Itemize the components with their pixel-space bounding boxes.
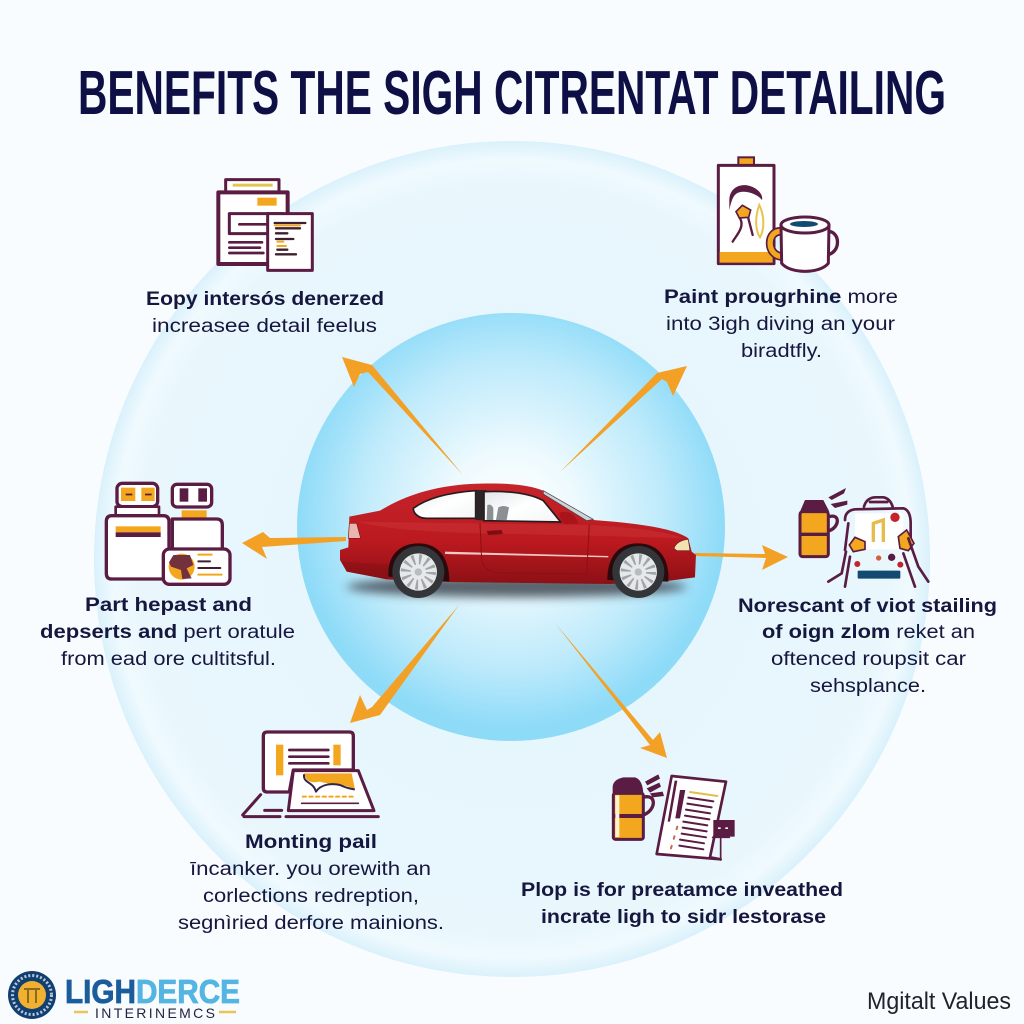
inner circle <box>297 313 725 741</box>
text block: bottom left: īncanker. you orewith an <box>190 859 431 880</box>
icon: bottle and mug <box>718 157 837 271</box>
text block: top right: biradtfly. <box>741 341 822 362</box>
arrow: top left <box>342 357 463 475</box>
text block: bottom left: segnìried derfore mainions. <box>178 913 444 934</box>
text block: right: Norescant of viot stailing <box>738 596 997 617</box>
arrow: bottom right <box>555 623 667 758</box>
text block: bottom right: incrate ligh to sidr lestorase <box>541 907 826 928</box>
text block: top left <box>146 289 384 337</box>
text block: top right <box>664 287 898 362</box>
icon: containers and card <box>106 483 230 584</box>
text block: left: Part hepast and <box>85 595 252 616</box>
seats <box>487 505 509 520</box>
rear window <box>413 491 476 518</box>
arrow: bottom left <box>350 605 459 723</box>
text block: right: oftenced roupsit car <box>771 649 967 670</box>
icon: flask and document <box>613 774 735 860</box>
text block: right: sehsplance. <box>810 676 926 697</box>
icon: flask and hands <box>800 488 928 587</box>
text block: top right: into 3igh diving an your <box>666 314 896 335</box>
text block: bottom right: Plop is for preatamce inveathed <box>521 880 843 901</box>
headlight <box>674 539 690 551</box>
text block: top right: Paint prougrhine more <box>664 287 898 308</box>
pillar <box>476 490 487 521</box>
windshield <box>543 491 593 521</box>
arrow: left <box>242 532 346 559</box>
icon: documents <box>218 180 312 270</box>
text block: left: depserts and pert oratule <box>40 622 295 643</box>
tail light <box>348 523 361 538</box>
logo <box>8 971 240 1021</box>
car <box>340 484 696 598</box>
text block: top left: increasee detail feelus <box>152 316 377 337</box>
brand text: Mgitalt Values <box>867 988 1011 1015</box>
text block: bottom left: Monting pail <box>245 832 377 853</box>
text block: left: from ead ore cultitsful. <box>61 649 276 670</box>
door handle <box>487 530 503 535</box>
front wheel <box>612 546 664 598</box>
front window <box>484 491 561 522</box>
mirror <box>559 512 578 524</box>
text block: left <box>40 595 295 670</box>
rear wheel <box>392 546 444 598</box>
wheel arches <box>388 543 449 582</box>
text block: right <box>738 596 997 697</box>
logo: LIGHDERCE <box>65 973 240 1010</box>
text block: bottom right <box>521 880 843 928</box>
text block: bottom left <box>178 832 444 934</box>
text block: bottom left: corlections redreption, <box>203 886 419 907</box>
arrow: top right <box>560 366 687 472</box>
logo: INTERINEMCS <box>95 1005 215 1021</box>
text block: top left: Eopy intersós denerzed <box>146 289 384 310</box>
outer circle <box>94 141 930 977</box>
text block: right: of oign zlom reket an <box>762 622 975 643</box>
icon: laptop <box>243 732 378 817</box>
arrow: right <box>695 545 788 570</box>
